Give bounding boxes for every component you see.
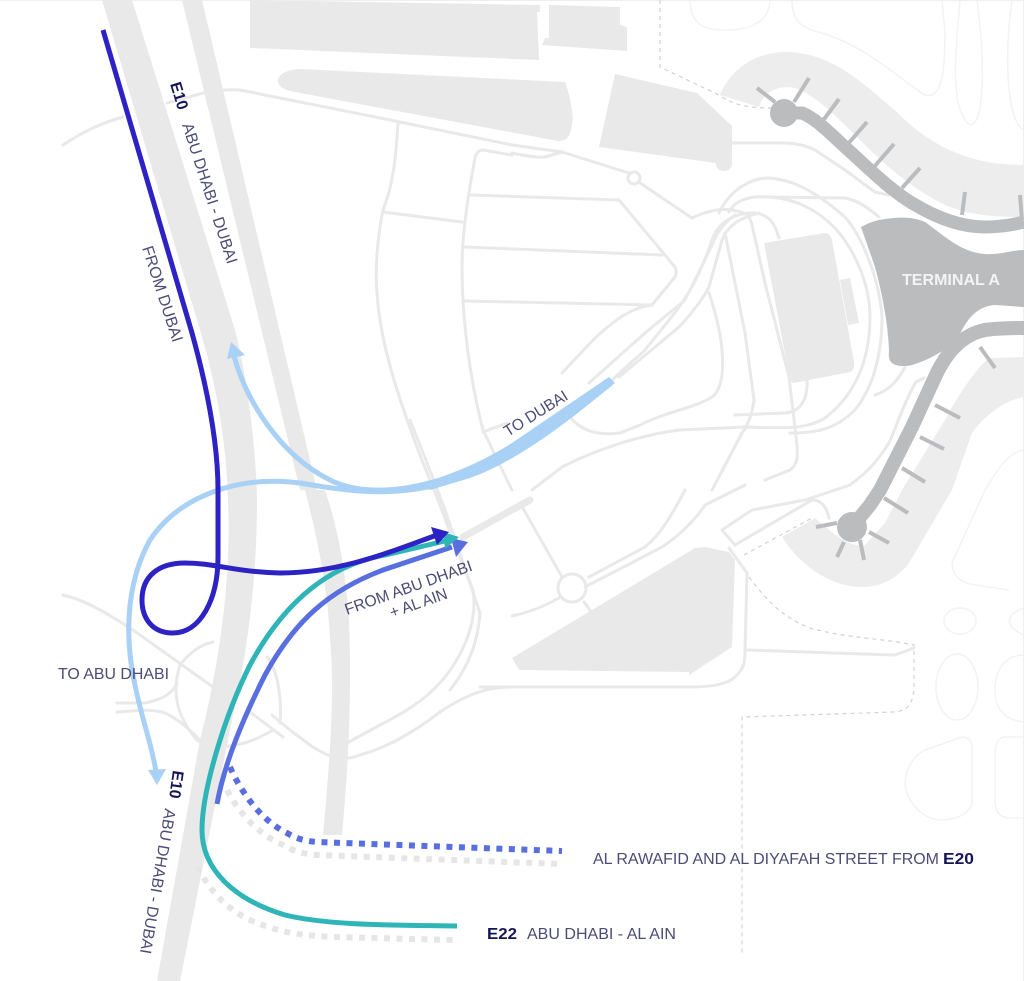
building: south car park	[512, 547, 735, 675]
highway E10 road	[102, 0, 257, 981]
label: from Dubai: FROM DUBAI	[138, 244, 185, 344]
dashed boundary lines	[660, 0, 914, 953]
label: E10 north: E10	[166, 80, 191, 112]
label: Abu Dhabi - Dubai south: ABU DHABI - DUBAI	[136, 807, 178, 955]
buildings	[250, 0, 859, 675]
label: Abu Dhabi - Al Ain: ABU DHABI - AL AIN	[527, 926, 676, 943]
building: north annex	[542, 5, 627, 51]
building: central	[764, 233, 854, 383]
arrow: to E10 north	[227, 342, 245, 359]
label: Al Rawafid street: AL RAWAFID AND AL DIYAFAH STREET FROM	[593, 851, 939, 868]
building: north car park	[250, 0, 540, 60]
label: plus Al Ain: + AL AIN	[388, 586, 450, 622]
parallel road	[182, 0, 350, 835]
upper concourse	[757, 78, 1024, 227]
label: E10 south: E10	[165, 769, 186, 800]
label: E20: E20	[943, 851, 974, 868]
route: E22, teal	[202, 532, 459, 926]
building: west block	[599, 74, 732, 171]
building: long hall	[278, 69, 573, 141]
label: to Abu Dhabi: TO ABU DHABI	[58, 666, 169, 683]
label: E22: E22	[487, 926, 517, 943]
label: Abu Dhabi - Dubai north: ABU DHABI - DUBAI	[178, 121, 240, 266]
concourse apron lower	[782, 357, 1024, 587]
terminal A building	[861, 218, 1024, 366]
route: from Dubai, dark blue loop	[103, 30, 449, 633]
label: from Abu Dhabi: FROM ABU DHABI	[343, 558, 475, 619]
lower concourse	[816, 328, 1024, 560]
route: E20 dotted approach	[230, 767, 562, 851]
arrow: to E10 south	[148, 769, 166, 785]
concourse apron upper	[720, 52, 1024, 217]
thin grey roads	[63, 90, 924, 758]
building: central annex	[840, 278, 859, 325]
route: to Dubai and Abu Dhabi, light blue	[129, 342, 615, 785]
label: to Dubai: TO DUBAI	[501, 388, 571, 440]
dotted road shadows	[197, 790, 562, 940]
label: Terminal A: TERMINAL A	[902, 272, 1000, 289]
route: from Abu Dhabi, periwinkle	[217, 538, 468, 804]
